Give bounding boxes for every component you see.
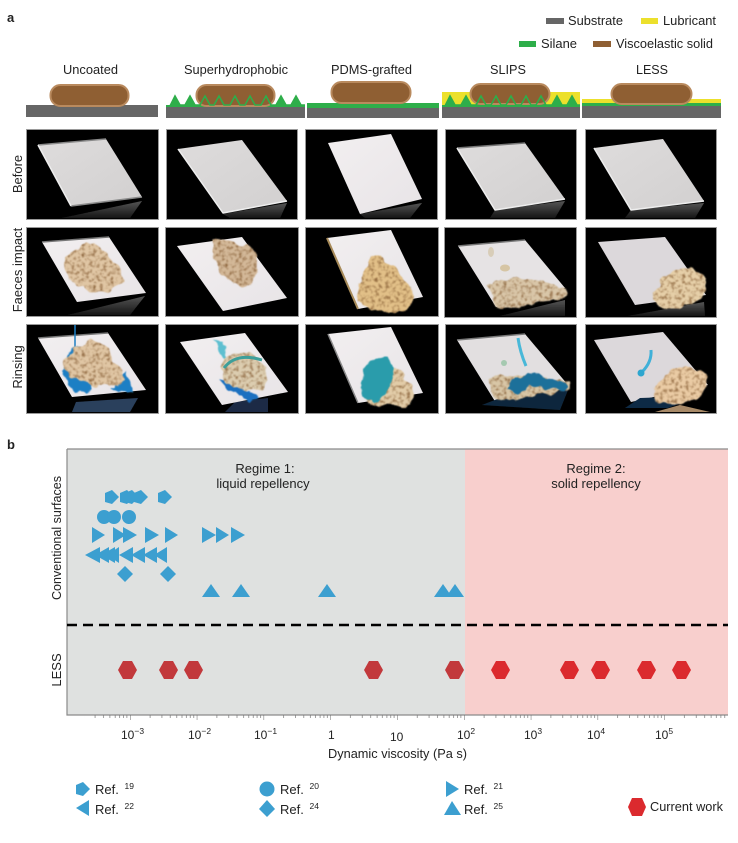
photo: before, uncoated: [26, 130, 158, 220]
legend: ref 25: 25: [493, 801, 503, 811]
legend: current work: Current work: [650, 799, 723, 814]
row label: before: Before: [10, 155, 25, 193]
photo: impact, PDMS-grafted: [306, 228, 438, 316]
regime 1 label: [216, 461, 310, 491]
x axis tick labels: −3: [134, 726, 144, 736]
photo: rinsing, LESS: [586, 324, 716, 414]
regime 1 label: Regime 1:: [235, 461, 295, 476]
markers: ref 21 right triangles: [92, 527, 245, 543]
x axis ticks: [84, 715, 727, 721]
schematic: LESS: [582, 62, 721, 118]
schematic: uncoated: Uncoated: [63, 62, 118, 77]
legend item: lubricant: Lubricant: [663, 13, 716, 28]
x axis tick labels: [121, 726, 673, 744]
y label: LESS: LESS: [49, 653, 64, 687]
schematic: superhydrophobic: [166, 62, 305, 118]
photo: rinsing, uncoated: [26, 324, 158, 414]
x axis tick labels: 10: [655, 728, 668, 742]
marker legend: [76, 781, 723, 817]
panel label a: a: [7, 10, 15, 25]
markers: ref 25 up triangles: [202, 584, 464, 597]
x axis tick labels: −2: [201, 726, 211, 736]
legend: ref 24: Ref.: [280, 802, 304, 817]
x axis tick labels: 3: [537, 726, 542, 736]
photo: rinsing, superhydrophobic: [166, 324, 298, 414]
schematic row: [26, 62, 721, 118]
legend: ref 24: [259, 800, 319, 817]
photo: rinsing, SLIPS: [446, 324, 576, 414]
legend: current work: [628, 798, 723, 816]
x axis tick labels: 10: [188, 728, 201, 742]
photo: impact, LESS: [586, 228, 716, 318]
schematic: uncoated: [26, 62, 158, 117]
x axis tick labels: 10: [390, 730, 404, 744]
x axis tick labels: 5: [668, 726, 673, 736]
legend: ref 20: Ref.: [280, 782, 304, 797]
legend item: viscoelastic solid: Viscoelastic solid: [616, 36, 713, 51]
markers: ref 22 left triangles: [85, 547, 167, 563]
schematic: SLIPS: SLIPS: [490, 62, 526, 77]
markers: ref 20 circles: [97, 510, 136, 524]
x axis tick labels: 10: [587, 728, 600, 742]
photo: rinsing, PDMS-grafted: [306, 324, 438, 414]
legend: ref 21: [446, 781, 503, 797]
legend: ref 21: 21: [493, 781, 503, 791]
markers: ref 24 diamonds: [117, 566, 176, 582]
x axis tick labels: 10: [254, 728, 267, 742]
y label: conventional surfaces: Conventional surfaces: [49, 476, 64, 600]
chart: viscosity regimes: [49, 449, 728, 761]
x axis tick labels: 10: [457, 728, 470, 742]
legend: ref 20: 20: [309, 781, 319, 791]
photo: before, superhydrophobic: [166, 130, 298, 220]
legend: materials: [519, 13, 716, 51]
x axis tick labels: 2: [470, 726, 475, 736]
divider between conventional surfaces and LESS: [67, 624, 728, 626]
legend: ref 22: [76, 800, 134, 817]
schematic: PDMS-grafted: PDMS-grafted: [331, 62, 412, 77]
legend: ref 19: Ref.: [95, 782, 119, 797]
photo: before, PDMS-grafted: [306, 130, 438, 220]
markers: current work hexagons: [118, 661, 691, 679]
legend: ref 22: 22: [124, 801, 134, 811]
x axis tick labels: −1: [267, 726, 277, 736]
legend: ref 19: [76, 781, 134, 797]
x axis tick labels: 10: [121, 728, 134, 742]
legend: ref 21: Ref.: [464, 782, 488, 797]
legend: ref 25: Ref.: [464, 802, 488, 817]
markers: ref 19 pentagons: [105, 490, 172, 504]
regime 1 label: liquid repellency: [216, 476, 310, 491]
panel label b: b: [7, 437, 15, 452]
x axis tick labels: 4: [600, 726, 605, 736]
regime 2 label: Regime 2:: [566, 461, 626, 476]
legend: ref 19: 19: [124, 781, 134, 791]
legend item: silane: Silane: [541, 36, 577, 51]
schematic: superhydrophobic: Superhydrophobic: [184, 62, 288, 77]
schematic: LESS: LESS: [636, 62, 668, 77]
photo: before, SLIPS: [446, 130, 576, 220]
photo: impact, superhydrophobic: [166, 228, 298, 316]
row label: rinsing: Rinsing: [10, 345, 25, 389]
row label: faeces impact: Faeces impact: [10, 227, 25, 312]
x axis title: Dynamic viscosity (Pa s): [328, 746, 467, 761]
legend: ref 25: [444, 801, 503, 817]
regime 2 background: [465, 449, 728, 715]
legend: ref 24: 24: [309, 801, 319, 811]
legend item: substrate: Substrate: [568, 13, 623, 28]
schematic: PDMS-grafted: [307, 62, 439, 118]
legend: ref 20: [260, 781, 319, 797]
photo grid: [26, 130, 716, 414]
photo: impact, SLIPS: [444, 228, 576, 318]
x axis tick labels: 1: [328, 728, 335, 742]
regime 2 label: [551, 461, 641, 491]
photo: before, LESS: [586, 130, 716, 220]
x axis tick labels: 10: [524, 728, 537, 742]
legend item: silane: [519, 36, 577, 51]
regime 1 background: [67, 449, 465, 715]
legend: ref 22: Ref.: [95, 802, 119, 817]
regime 2 label: solid repellency: [551, 476, 641, 491]
photo: impact, uncoated: [26, 228, 158, 316]
schematic: SLIPS: [442, 62, 580, 118]
